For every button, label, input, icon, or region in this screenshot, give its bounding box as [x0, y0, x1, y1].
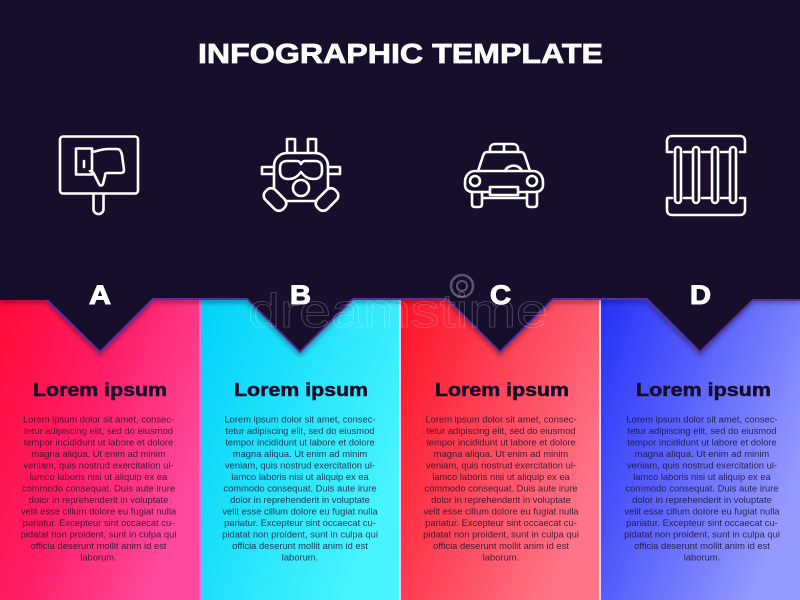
panel C text: Lorem ipsum dolor sit amet, consec- — [425, 414, 577, 424]
panel D text: lamco laboris nisi ut aliquip ex ea — [633, 471, 772, 482]
notch shadow — [0, 301, 800, 354]
letter D: D — [690, 280, 711, 310]
panel C text: dolor in reprehenderit in voluptate — [431, 494, 571, 505]
icon: thumbs down sign — [60, 136, 138, 214]
panel B text: magna aliqua. Ut enim ad minim — [233, 448, 367, 459]
panel B heading: Lorem ipsum — [234, 380, 368, 400]
panel C text: pidatat non proident, sunt in culpa qui — [423, 528, 579, 540]
panel B text: tempor incididunt ut labore et dolore — [225, 436, 375, 448]
panel C — [400, 300, 600, 600]
panel A text: laborum. — [80, 552, 117, 562]
panel A text: tempor incididunt ut labore et dolore — [24, 436, 173, 448]
panel D text: pariatur. Excepteur sint occaecat cu- — [626, 517, 778, 528]
panel C text: tempor incididunt ut labore et dolore — [426, 436, 576, 448]
panel D text: officia deserunt mollit anim id est — [634, 540, 770, 551]
title: INFOGRAPHIC TEMPLATE — [198, 38, 603, 69]
panel C text: laborum. — [483, 552, 519, 562]
panel A — [0, 300, 200, 600]
panel C text — [423, 414, 579, 562]
panel A text: magna aliqua. Ut enim ad minim — [31, 448, 166, 459]
icon: taxi car — [465, 144, 543, 207]
panel B text: lamco laboris nisi ut aliquip ex ea — [231, 471, 370, 482]
icon: gas mask — [261, 139, 341, 213]
panel B text: pidatat non proident, sunt in culpa qui — [222, 528, 378, 540]
panel C text: magna aliqua. Ut enim ad minim — [434, 448, 568, 459]
panel C text: lamco laboris nisi ut aliquip ex ea — [432, 471, 571, 482]
panel B text: Lorem ipsum dolor sit amet, consec- — [224, 414, 376, 424]
letter B: B — [290, 280, 311, 310]
panel A text: lamco laboris nisi ut aliquip ex ea — [30, 471, 168, 482]
panel C text: veniam, quis nostrud exercitation ul- — [426, 460, 576, 470]
panel A text: pidatat non proident, sunt in culpa qui — [21, 528, 176, 540]
watermark: dreamstime — [248, 284, 548, 337]
panel D text: velit esse cillum dolore eu fugiat nulla — [624, 506, 780, 516]
panel D text: tempor incididunt ut labore et dolore — [627, 436, 777, 448]
panel dividers — [199, 300, 601, 600]
panel B text: commodo consequat. Duis aute irure — [223, 482, 377, 494]
panel B text: dolor in reprehenderit in voluptate — [230, 494, 370, 505]
panel D heading: Lorem ipsum — [636, 380, 771, 400]
panel D — [600, 300, 800, 600]
watermark — [248, 275, 548, 337]
panel A text — [21, 414, 177, 562]
panel A heading: Lorem ipsum — [33, 380, 167, 400]
panel D text: commodo consequat. Duis aute irure — [625, 482, 779, 494]
panel C heading: Lorem ipsum — [435, 380, 569, 400]
panel B text: officia deserunt mollit anim id est — [232, 540, 368, 551]
panel D text: pidatat non proident, sunt in culpa qui — [624, 528, 780, 540]
letter C: C — [490, 280, 511, 310]
panel B text: veniam, quis nostrud exercitation ul- — [225, 460, 375, 470]
letter A: A — [89, 280, 111, 310]
panel A text: pariatur. Excepteur sint occaecat cu- — [23, 517, 174, 528]
panel A text: Lorem ipsum dolor sit amet, consec- — [23, 414, 174, 424]
panel B text: laborum. — [282, 552, 318, 562]
panel B text — [222, 414, 378, 562]
panel B text: tetur adipiscing elit, sed do eiusmod — [225, 425, 375, 436]
panel C text: tetur adipiscing elit, sed do eiusmod — [426, 425, 576, 436]
panel C text: pariatur. Excepteur sint occaecat cu- — [425, 517, 577, 528]
panel D text: dolor in reprehenderit in voluptate — [632, 494, 772, 505]
panel B text: velit esse cillum dolore eu fugiat nulla — [222, 506, 378, 516]
panel C text: commodo consequat. Duis aute irure — [424, 482, 578, 494]
panel B — [200, 300, 400, 600]
panel A text: velit esse cillum dolore eu fugiat nulla — [21, 506, 177, 516]
panel A text: veniam, quis nostrud exercitation ul- — [23, 460, 174, 470]
panel C text: velit esse cillum dolore eu fugiat nulla — [423, 506, 579, 516]
notch outline — [47, 299, 800, 352]
panel B text: pariatur. Excepteur sint occaecat cu- — [224, 517, 376, 528]
panel D text — [624, 414, 780, 562]
panel A text: commodo consequat. Duis aute irure — [22, 482, 175, 494]
panel D text: magna aliqua. Ut enim ad minim — [635, 448, 769, 459]
panel A text: tetur adipiscing elit, sed do eiusmod — [24, 425, 173, 436]
panel A text: officia deserunt mollit anim id est — [31, 540, 167, 551]
panel C text: officia deserunt mollit anim id est — [433, 540, 569, 551]
panel D text: Lorem ipsum dolor sit amet, consec- — [626, 414, 778, 424]
panel D text: tetur adipiscing elit, sed do eiusmod — [627, 425, 777, 436]
notched header edge — [0, 0, 800, 352]
panel A text: dolor in reprehenderit in voluptate — [29, 494, 168, 505]
panel D text: veniam, quis nostrud exercitation ul- — [627, 460, 777, 470]
icon: prison bars window — [667, 136, 745, 215]
panel D text: laborum. — [684, 552, 720, 562]
